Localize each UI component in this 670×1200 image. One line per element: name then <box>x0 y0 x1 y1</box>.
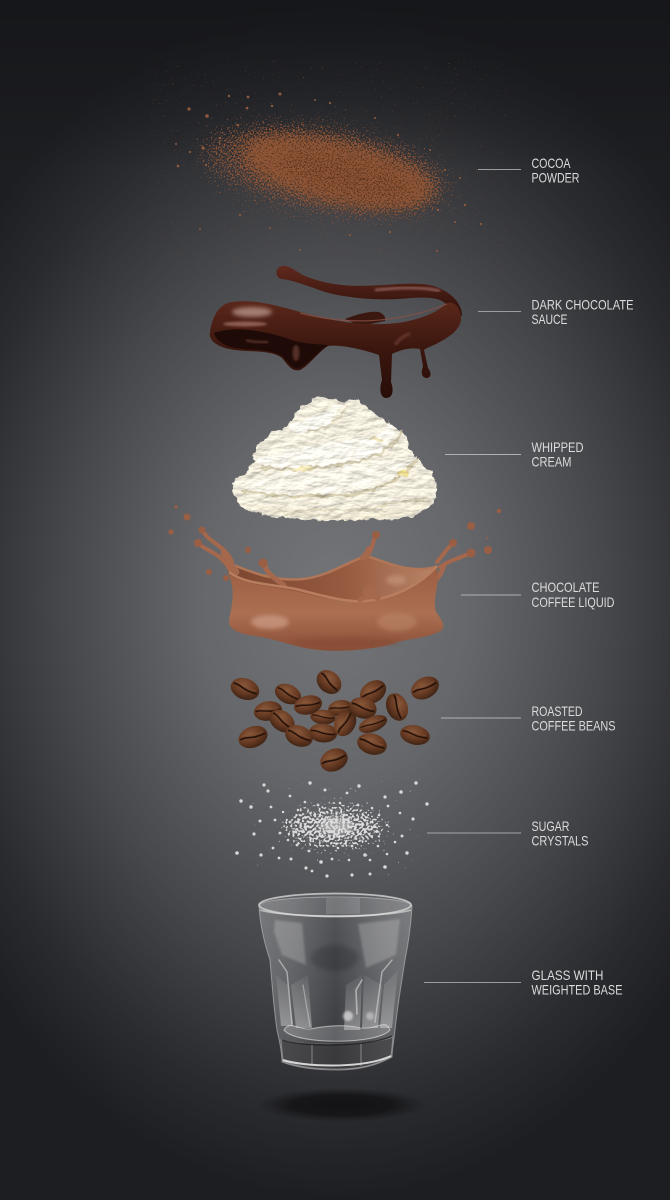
dark inner loop <box>214 329 328 368</box>
splash highlights <box>251 615 289 629</box>
small inner fold <box>345 312 385 326</box>
label: chocolate coffee liquid: COFFEE LIQUID <box>532 594 614 610</box>
label: whipped cream <box>445 439 584 470</box>
label: dark chocolate sauce <box>478 296 634 327</box>
upper reflections <box>274 920 306 965</box>
label: cocoa powder: POWDER <box>532 170 580 186</box>
glass rim <box>259 894 411 916</box>
cream silhouette <box>232 395 437 520</box>
label: chocolate coffee liquid <box>461 579 614 610</box>
roasted coffee beans <box>228 665 443 776</box>
back ribbon <box>276 266 462 316</box>
label: dark chocolate sauce: SAUCE <box>532 311 568 327</box>
weighted base <box>281 1037 393 1069</box>
label: glass with weighted base: GLASS WITH <box>532 967 604 983</box>
label: chocolate coffee liquid: CHOCOLATE <box>532 579 600 595</box>
chocolate coffee liquid splash <box>168 505 501 651</box>
label: roasted coffee beans: COFFEE BEANS <box>532 718 616 734</box>
main ribbon body <box>210 301 461 398</box>
glass body <box>259 897 412 1070</box>
label: whipped cream: WHIPPED <box>532 439 584 455</box>
glossy highlights <box>232 307 272 317</box>
label: glass with weighted base <box>424 967 622 998</box>
label: sugar crystals <box>427 818 588 848</box>
glass shadow <box>257 1088 427 1122</box>
splash bowl <box>228 568 443 651</box>
label: cocoa powder: COCOA <box>532 155 571 171</box>
label: sugar crystals: CRYSTALS <box>532 832 588 848</box>
label: sugar crystals: SUGAR <box>532 818 570 834</box>
facet lines <box>279 960 392 1026</box>
labels <box>424 155 634 998</box>
glass with weighted base <box>259 894 412 1070</box>
sugar crystals <box>235 781 429 878</box>
label: cocoa powder <box>478 155 580 186</box>
whipped cream <box>232 395 437 520</box>
label: glass with weighted base: WEIGHTED BASE <box>532 982 622 998</box>
dark chocolate sauce <box>210 266 462 398</box>
label: whipped cream: CREAM <box>532 454 572 470</box>
inner base ring <box>284 1025 390 1041</box>
splash inner wall <box>228 556 437 602</box>
cocoa powder <box>175 92 482 252</box>
label: roasted coffee beans: ROASTED <box>532 703 582 719</box>
splash droplets <box>168 505 501 581</box>
lower facet panels <box>276 975 293 1026</box>
label: roasted coffee beans <box>441 703 616 734</box>
splash crown spikes <box>199 531 471 585</box>
label: dark chocolate sauce: DARK CHOCOLATE <box>532 296 634 312</box>
